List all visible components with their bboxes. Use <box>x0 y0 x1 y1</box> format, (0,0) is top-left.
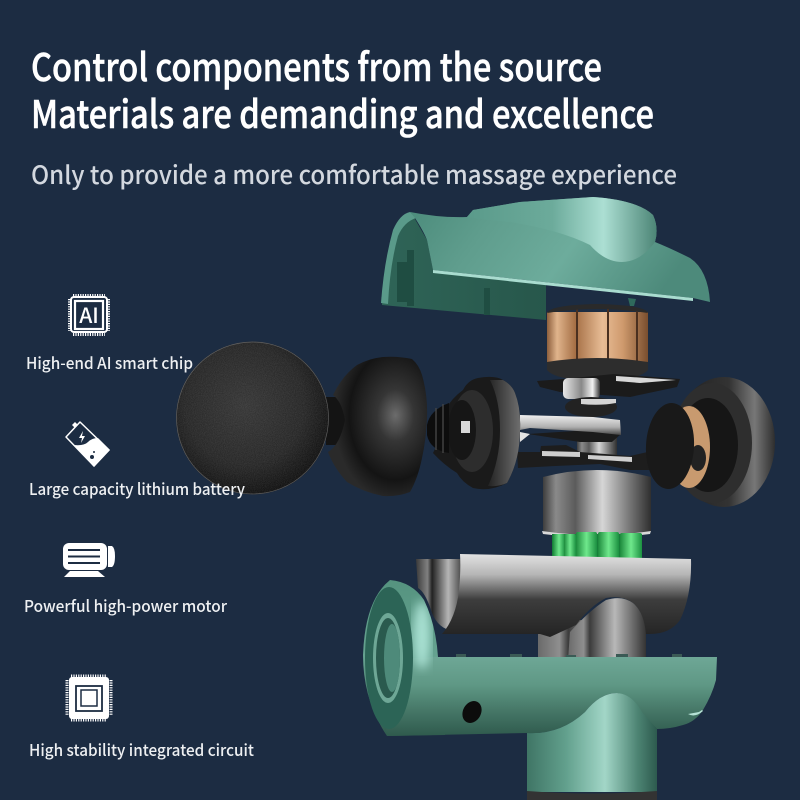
shell main surface <box>410 197 710 302</box>
arm small tip <box>520 432 530 442</box>
flange and bellows <box>427 377 520 489</box>
handle shoulder <box>527 693 657 792</box>
plate highlight <box>616 376 676 383</box>
icon: battery <box>66 422 110 467</box>
bearing <box>563 378 600 399</box>
grey barrel <box>442 554 691 637</box>
label: motor: Powerful high-power motor <box>24 593 227 617</box>
drum recess <box>678 398 738 492</box>
green body <box>380 657 717 736</box>
motor can <box>542 470 651 538</box>
bellows rib <box>436 404 443 453</box>
icon: motor <box>63 543 115 577</box>
subtitle: Only to provide a more comfortable massage experience <box>31 156 677 192</box>
side button <box>459 698 485 726</box>
coil bottom cap <box>547 358 648 381</box>
upper plate <box>537 374 680 397</box>
crank and bearing assembly <box>517 374 680 470</box>
feature: integrated circuit <box>29 676 255 761</box>
neck upper highlight <box>568 598 646 660</box>
lower linkage <box>517 445 657 470</box>
flange outer <box>433 377 520 489</box>
rear vent <box>688 710 703 715</box>
outer drum <box>673 377 775 507</box>
shell edge highlight <box>433 270 693 301</box>
copper motor coil <box>547 304 648 381</box>
disk highlight <box>581 399 616 405</box>
grey neck <box>538 620 646 660</box>
label: circuit: High stability integrated circuit <box>29 737 255 761</box>
interior ribs <box>397 250 490 315</box>
eccentric disk <box>565 397 617 417</box>
feature: motor <box>24 543 227 617</box>
drum face <box>672 383 752 503</box>
flange cone <box>451 390 493 472</box>
top shell <box>381 197 710 320</box>
title <box>31 37 654 139</box>
front ring detail <box>365 587 431 729</box>
ball rim light <box>176 342 328 494</box>
ball texture <box>176 342 328 494</box>
flange grey rim <box>488 380 520 486</box>
centre shaft <box>577 436 617 458</box>
coil slots <box>576 309 638 367</box>
arm shadow <box>528 430 621 442</box>
black cup <box>328 357 427 496</box>
flange inner shade <box>448 400 476 460</box>
connecting arm <box>520 415 621 435</box>
copper crescent <box>668 406 710 488</box>
front ring base <box>363 580 445 736</box>
icon: circuit <box>67 676 111 720</box>
flange bright notch <box>461 421 470 433</box>
label: battery: Large capacity lithium battery <box>29 476 245 500</box>
feature: AI chip <box>26 296 193 374</box>
inner hub <box>690 445 706 471</box>
shell arch lip <box>381 212 416 304</box>
neck <box>326 397 346 445</box>
shell interior <box>382 214 546 320</box>
right drum assembly <box>644 377 775 507</box>
barrel end cap <box>416 559 462 630</box>
shell lower tab <box>628 298 636 306</box>
bellows <box>427 403 449 453</box>
title line 1: Control components from the source <box>31 37 602 92</box>
massage gun lower body <box>363 470 717 800</box>
label: AI chip: High-end AI smart chip <box>26 350 193 374</box>
coil winding <box>547 312 648 365</box>
green battery cells <box>552 532 642 560</box>
foam ball <box>176 342 329 494</box>
massage ball head <box>176 342 427 496</box>
icon: AI chip <box>70 296 108 334</box>
body edge notches <box>456 654 682 657</box>
dark grip band <box>527 791 657 800</box>
linkage highlight <box>542 451 632 462</box>
icon: AI chip: AI <box>79 300 99 330</box>
title line 2: Materials are demanding and excellence <box>31 84 654 139</box>
black disc <box>644 402 696 490</box>
coil top cap <box>547 304 648 313</box>
shell top hump <box>467 197 657 262</box>
feature: lithium battery <box>29 422 245 500</box>
